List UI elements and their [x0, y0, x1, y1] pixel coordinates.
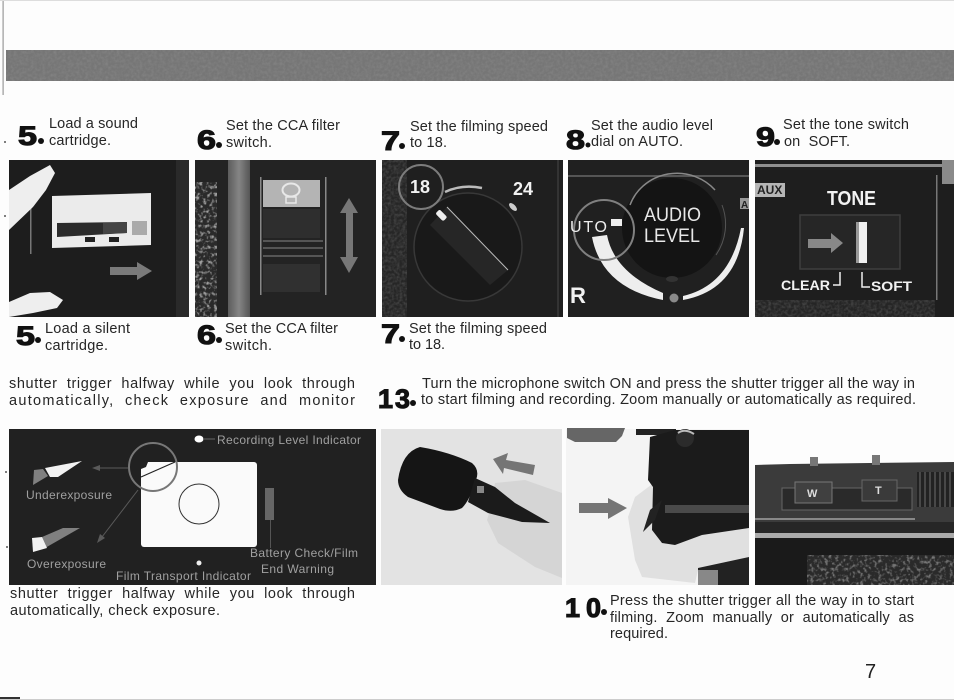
step 5 alternative: silent cartridge: cartridge.	[45, 338, 108, 354]
highlight circle with 18	[399, 165, 443, 209]
step 5: load a sound cartridge: 5	[18, 121, 37, 151]
icon: microphone	[398, 447, 550, 523]
paragraph: shutter trigger, check exposure: automatically, check exposure.	[10, 603, 220, 619]
step 8: set audio level dial	[566, 118, 713, 155]
page number: 7	[865, 661, 876, 683]
W button	[795, 482, 832, 503]
arrow	[493, 453, 535, 475]
icon: overexposure needle	[32, 528, 80, 552]
SOFT label: SOFT	[871, 278, 912, 294]
step 10: press shutter trigger: required.	[610, 626, 668, 642]
step 6: set CCA filter switch	[197, 118, 340, 155]
T button: T	[875, 485, 882, 497]
step 7 alternative: filming speed: to 18.	[409, 337, 445, 353]
icon: finger bottom	[9, 292, 63, 317]
icon: underexposure needle	[33, 461, 82, 485]
icon: hand	[487, 480, 562, 578]
step 6: set CCA filter switch: switch.	[226, 135, 272, 151]
battery check / film end warning: End Warning	[261, 562, 334, 576]
recording level indicator: Recording Level Indicator	[217, 433, 361, 447]
photo: zoom W and T buttons	[755, 455, 954, 585]
paragraph: shutter trigger, exposure and monitor	[9, 376, 355, 409]
step 10: press shutter trigger: filming. Zoom manually or automatically as	[610, 610, 914, 626]
step 6 alternative: CCA filter: 6	[197, 320, 216, 350]
viewfinder screen	[141, 462, 257, 547]
TONE label: TONE	[827, 188, 876, 210]
arrow	[579, 498, 627, 519]
film transport indicator: Film Transport Indicator	[116, 569, 251, 583]
double arrow up and down	[340, 198, 358, 273]
step 5: load a sound cartridge: Load a sound	[49, 116, 138, 132]
W button: W	[807, 488, 818, 500]
CLEAR label	[781, 272, 840, 293]
step 13: microphone on and start filming: 13	[378, 384, 410, 414]
AUTO highlight	[570, 200, 634, 260]
step 7: set filming speed: 7	[381, 126, 400, 156]
label: overexposure: Overexposure	[27, 557, 106, 571]
photo: pressing shutter trigger on camera	[566, 428, 749, 585]
step 9: set tone switch: on SOFT.	[784, 134, 850, 150]
exposure needle highlight circle	[129, 443, 177, 491]
step 8: set audio level dial: 8	[566, 125, 585, 155]
panel: viewfinder diagram	[9, 429, 376, 585]
photo: microphone in hand	[381, 429, 562, 585]
CLEAR label: CLEAR	[781, 277, 830, 293]
step 13: microphone on and start filming	[378, 376, 916, 414]
step 7 alternative: filming speed	[381, 319, 547, 353]
step 6 alternative: CCA filter: switch.	[225, 338, 272, 354]
step 9: set tone switch	[756, 117, 909, 152]
step 5: load a sound cartridge: cartridge.	[49, 133, 111, 149]
photo: filming speed dial	[382, 160, 563, 317]
step 7 alternative: filming speed: Set the filming speed	[409, 321, 547, 337]
camera body	[643, 429, 749, 545]
photo: audio level dial	[568, 160, 749, 317]
header band	[6, 50, 954, 81]
switch window with lamp icon	[263, 180, 320, 207]
step 10: press shutter trigger: 10	[565, 593, 601, 623]
step 6 alternative: CCA filter: Set the CCA filter	[225, 321, 338, 337]
step 5: load a sound cartridge	[18, 116, 138, 151]
step 6 alternative: CCA filter	[197, 320, 338, 354]
photo: tone switch	[755, 160, 954, 317]
photo: audio level dial: R	[570, 283, 586, 308]
paragraph: shutter trigger, check exposure: shutter trigger halfway while you look through	[10, 586, 355, 602]
T button	[862, 480, 897, 501]
AUDIO LEVEL label	[644, 204, 701, 247]
AUDIO LEVEL label: AUDIO	[644, 204, 701, 226]
step 8: set audio level dial: dial on AUTO.	[591, 134, 683, 150]
photo: CCA filter switch	[195, 160, 376, 317]
photo: silent cartridge loading with fingers	[9, 160, 189, 317]
arrow to overexposure	[97, 490, 138, 543]
paragraph: shutter trigger, exposure and monitor: shutter trigger halfway while you look through	[9, 376, 355, 392]
step 5 alternative: silent cartridge	[16, 321, 130, 354]
step 7 alternative: filming speed: 7	[381, 319, 400, 349]
label 24: 24	[513, 179, 533, 199]
SOFT label	[862, 272, 912, 294]
step 10: press shutter trigger	[565, 593, 914, 642]
step 7: set filming speed	[381, 119, 548, 156]
step 9: set tone switch: Set the tone switch	[783, 117, 909, 133]
tone slider	[800, 215, 900, 269]
icon: finger top	[9, 165, 55, 230]
step 6: set CCA filter switch: Set the CCA filter	[226, 118, 340, 134]
step 8: set audio level dial: Set the audio level	[591, 118, 713, 134]
AUDIO LEVEL label: LEVEL	[644, 225, 700, 247]
paragraph: shutter trigger, check exposure	[10, 586, 355, 619]
step 7: set filming speed: to 18.	[410, 135, 447, 151]
highlight circle with 18: 18	[410, 177, 430, 197]
film transport indicator	[116, 560, 251, 583]
step 10: press shutter trigger: Press the shutter trigger all the way in to start	[610, 593, 914, 609]
arrow right	[110, 262, 152, 280]
step 5 alternative: silent cartridge: Load a silent	[45, 321, 130, 337]
step 13: microphone on and start filming: Turn the microphone switch ON and press the shutter trigger all the way in	[422, 376, 915, 392]
battery check / film end warning: Battery Check/Film	[250, 546, 358, 560]
white level arc	[592, 235, 663, 300]
step 7: set filming speed: Set the filming speed	[410, 119, 548, 135]
AUTO highlight: UTO	[570, 219, 607, 236]
step 9: set tone switch: 9	[756, 122, 775, 152]
AUX tag: AUX	[757, 183, 782, 197]
icon: hand on grip	[628, 482, 749, 583]
step 5 alternative: silent cartridge: 5	[16, 321, 35, 351]
label: underexposure: Underexposure	[26, 488, 112, 502]
step 13: microphone on and start filming: to start filming and recording. Zoom manually or automatically as required.	[421, 392, 916, 408]
cartridge label	[52, 193, 151, 248]
arrow to underexposure	[92, 465, 128, 471]
photo: audio level dial: A	[741, 200, 748, 211]
step 6: set CCA filter switch: 6	[197, 125, 216, 155]
paragraph: shutter trigger, exposure and monitor: automatically, check exposure and monitor	[9, 393, 355, 409]
battery check / film end warning	[250, 488, 358, 576]
